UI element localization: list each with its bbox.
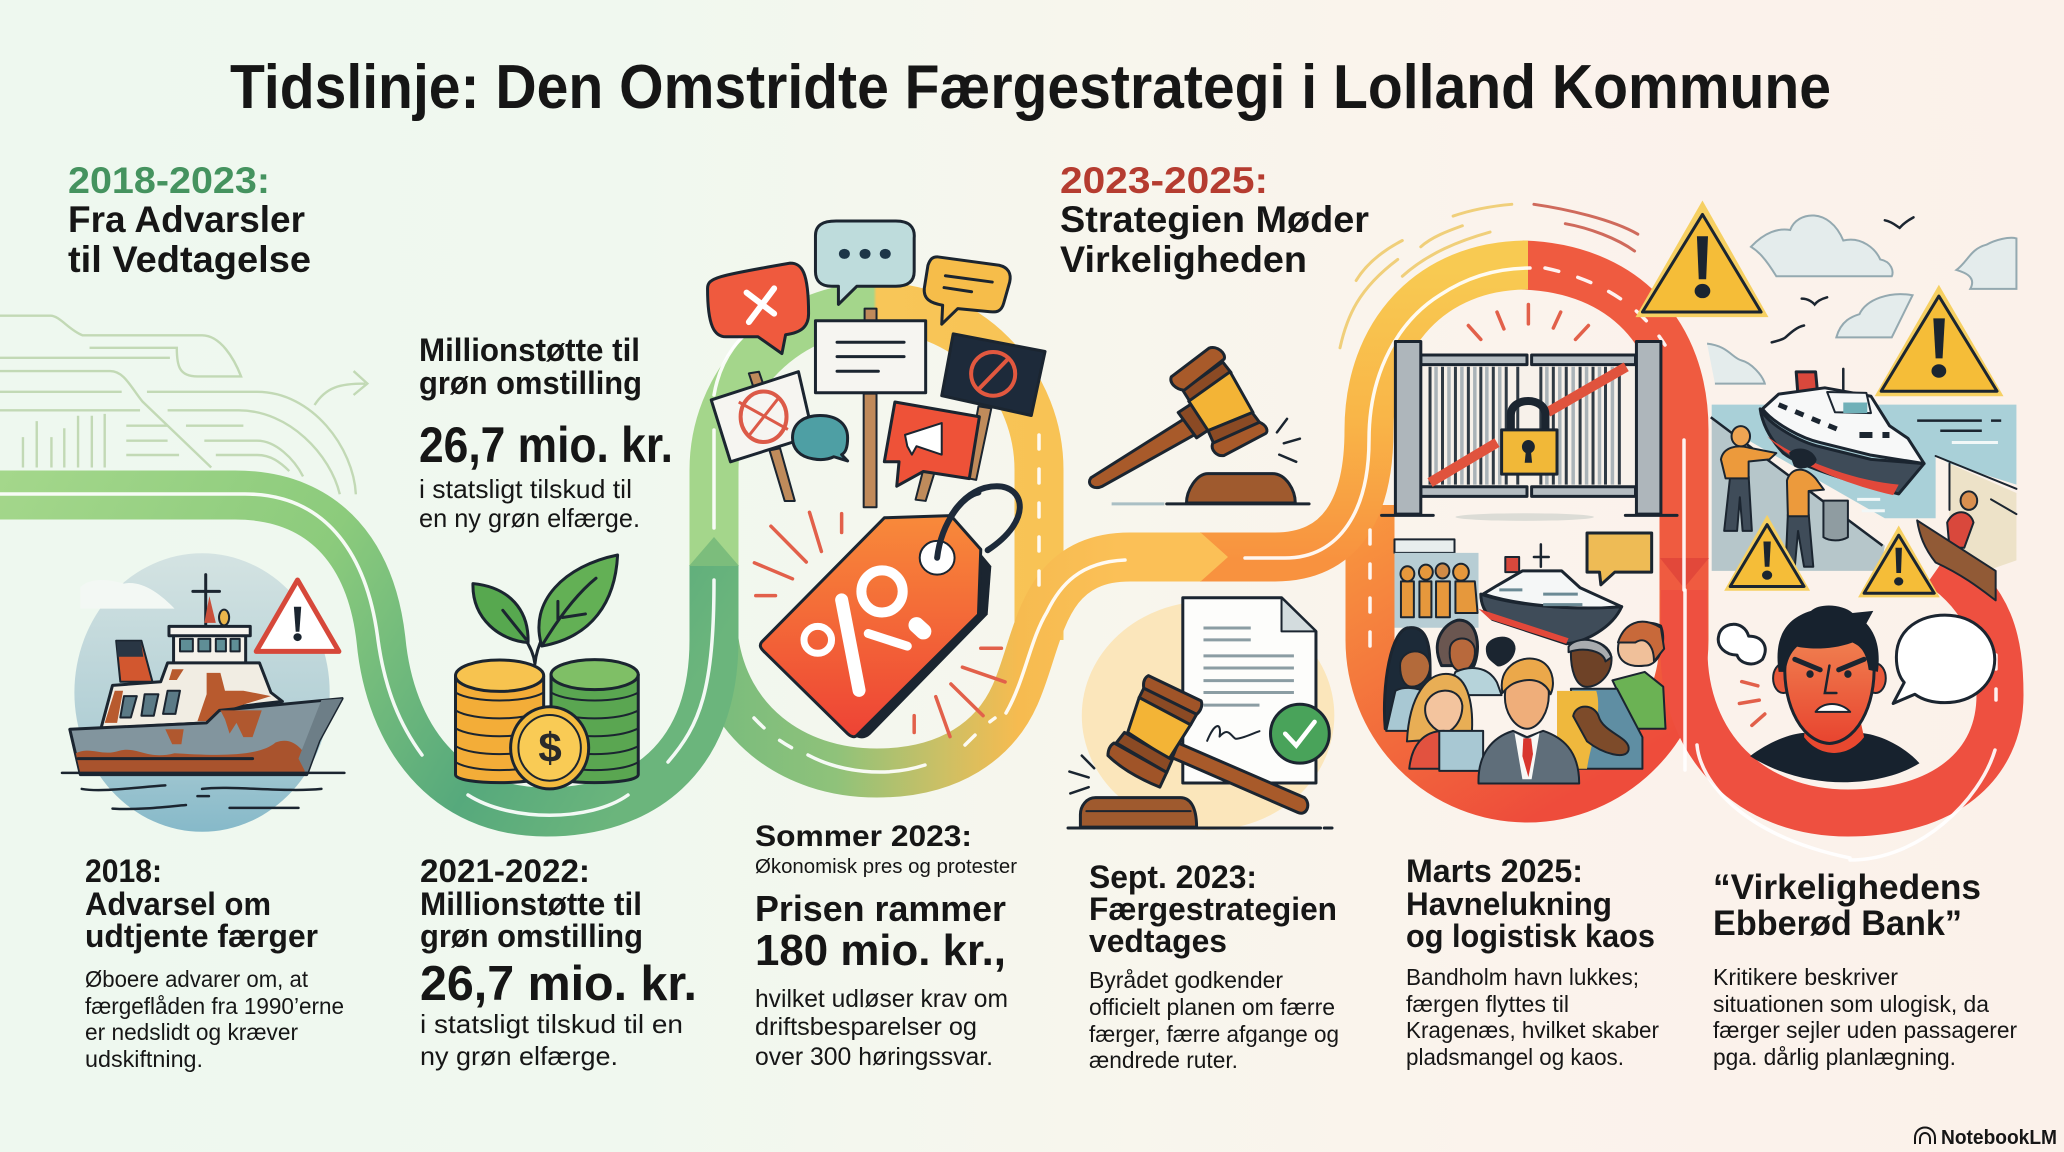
sparks [1468, 304, 1588, 339]
timeline text: quote: Kritikere beskriver [1713, 964, 1898, 990]
timeline text: Sept. 2023: Byrådet godkender [1089, 967, 1283, 993]
background decoration: faded ferry line art [0, 316, 367, 494]
back row people [1384, 628, 1430, 729]
callout: millionstøtte upper: grøn omstilling [419, 365, 642, 401]
ship backdrop circle [74, 553, 330, 832]
timeline text: 2018: udskiftning. [85, 1046, 203, 1072]
large coin [511, 707, 589, 789]
green check [1271, 704, 1329, 763]
timeline text: Sommer 2023: driftsbesparelser og [755, 1013, 977, 1041]
road centre lines [0, 268, 1850, 858]
timeline text: Marts 2025: færgen flyttes til [1406, 991, 1569, 1017]
callout: millionstøtte upper: en ny grøn elfærge. [419, 503, 640, 533]
yellow speech bubble [924, 257, 1010, 324]
sparks [1739, 682, 1765, 725]
chevron: green up [689, 537, 739, 566]
callout: millionstøtte upper: 26,7 mio. kr. [419, 417, 673, 473]
timeline text: Marts 2025: Bandholm havn lukkes; [1406, 964, 1639, 990]
mast [193, 575, 219, 625]
teal bubble [792, 416, 848, 461]
timeline text: 2021-2022: 26,7 mio. kr. [420, 957, 697, 1011]
brown boat [1917, 520, 1996, 600]
sprout leaves [501, 578, 597, 664]
icon: rusty ferry with warning [62, 553, 344, 832]
timeline road [0, 265, 2000, 860]
timeline text: 2018 [85, 853, 344, 1072]
timeline text: Marts 2025: og logistisk kaos [1406, 918, 1655, 954]
timeline text: Marts 2025: Kragenæs, hvilket skaber [1406, 1017, 1659, 1043]
icon: gavel upper [1090, 348, 1309, 504]
icon: document and gavel [1068, 598, 1334, 830]
timeline text: 2018: Øboere advarer om, at [85, 966, 309, 992]
timeline text: quote: Ebberød Bank” [1713, 904, 1962, 943]
red bar [1430, 367, 1626, 483]
ears [1773, 664, 1793, 693]
timeline text: Sommer 2023: Økonomisk pres og protester [755, 856, 1017, 878]
percent symbol [804, 570, 923, 690]
hair [1778, 606, 1879, 672]
head [1785, 638, 1874, 743]
ferry [1796, 372, 1818, 396]
speed lines above arch [1340, 204, 1512, 348]
blonde woman [1407, 674, 1472, 741]
terminal shelter [1394, 539, 1455, 553]
section heading: 2018-2023: til Vedtagelse [68, 239, 311, 280]
road: arch two red [1522, 265, 1684, 590]
shoulders [1750, 733, 1919, 782]
dark-skinned man [1571, 641, 1612, 687]
timeline text: Marts 2025: Havnelukning [1406, 886, 1612, 922]
timeline text: Sept. 2023: vedtages [1089, 923, 1227, 959]
timeline text: Marts 2025: Marts 2025: [1406, 853, 1583, 889]
birds [1772, 217, 1913, 342]
timeline text: Sommer 2023: over 300 høringssvar. [755, 1043, 993, 1071]
section heading: 2023-2025: 2023-2025: [1060, 160, 1268, 201]
gold stack [456, 676, 544, 783]
brows, eyes, mouth [1795, 659, 1864, 670]
gavel head [1183, 362, 1231, 401]
timeline text: Sommer 2023 [755, 820, 1017, 1071]
timeline text: quote: færger sejler uden passagerer [1713, 1017, 2017, 1043]
timeline text: Sept. 2023: Færgestrategien [1089, 891, 1337, 927]
clouds [1751, 215, 1893, 276]
gavel handle [1090, 419, 1197, 488]
chevron: red down [1660, 558, 1709, 588]
waiting passengers [1401, 581, 1478, 617]
timeline text: Sommer 2023: Prisen rammer [755, 888, 1006, 929]
section heading: 2023-2025: Virkeligheden [1060, 239, 1307, 280]
timeline text: 2018: udtjente færger [85, 918, 318, 954]
man in suit [1505, 678, 1549, 729]
watermark: NotebookLM: NotebookLM [1941, 1127, 2057, 1149]
road: arch two yellow-orange [1190, 265, 1528, 557]
icon: harbour scene [1636, 201, 2016, 600]
timeline text: 2018: 2018: [85, 853, 162, 889]
dollar sign: $ [538, 724, 562, 771]
timeline text: 2021-2022 [420, 853, 697, 1071]
speech bubble [1587, 533, 1652, 585]
timeline text: Sept. 2023: officielt planen om færre [1089, 994, 1335, 1020]
icon: protest signs and price tag [708, 221, 1045, 738]
timeline text: 2018: Advarsel om [85, 886, 271, 922]
small ferry [1481, 594, 1622, 644]
hull [70, 699, 342, 775]
sparks around tag [754, 512, 1005, 737]
title: Tidslinje: Den Omstridte Færgestrategi i Lolland Kommune [230, 53, 1831, 122]
sign: white centre [864, 309, 877, 507]
timeline text: Sommer 2023: Sommer 2023: [755, 820, 972, 853]
road dashed lines [754, 268, 1996, 752]
funnel [116, 641, 152, 682]
thought bubble [1718, 624, 1765, 664]
timeline text: 2021-2022: grøn omstilling [420, 918, 643, 954]
callout: millionstøtte upper: i statsligt tilskud til [419, 474, 632, 504]
section heading: 2018-2023: 2018-2023: [68, 160, 270, 201]
timeline text: Marts 2025: pladsmangel og kaos. [1406, 1044, 1624, 1070]
gate panel [1421, 365, 1636, 487]
padlock [1511, 401, 1545, 430]
section heading: 2023-2025 [1060, 160, 1369, 280]
timeline text: quote: “Virkelighedens [1713, 868, 1981, 907]
section heading: 2018-2023 [68, 160, 311, 280]
dock [1712, 417, 1885, 571]
timeline text: 2018: færgeflåden fra 1990’erne [85, 993, 344, 1019]
timeline text: Sept. 2023: ændrede ruter. [1089, 1047, 1238, 1073]
timeline text: Marts 2025 [1406, 853, 1659, 1070]
icon: coins and sprout [456, 555, 638, 789]
timeline text: Sept. 2023 [1089, 859, 1339, 1073]
warning signs [1636, 201, 2004, 597]
water lines [62, 773, 344, 809]
lower gavel [1172, 743, 1308, 813]
timeline text: 2018: er nedslidt og kræver [85, 1019, 298, 1045]
road: bottom loop green to yellow [714, 557, 1200, 773]
section heading: 2023-2025: Strategien Møder [1060, 199, 1369, 240]
gate posts [1395, 342, 1661, 514]
timeline text: quote [1713, 868, 2017, 1070]
road: arch one [714, 307, 1039, 640]
timeline text: 2021-2022: ny grøn elfærge. [420, 1041, 618, 1071]
chevron: yellow to orange right [1200, 532, 1228, 582]
price tag [850, 554, 991, 738]
road: third loop red [1684, 565, 2000, 813]
blue speech bubble [815, 221, 914, 304]
timeline text: Sommer 2023: 180 mio. kr., [755, 926, 1006, 975]
sea [1712, 405, 2016, 518]
person pointing [1724, 476, 1752, 531]
warning sign [256, 580, 339, 651]
person on dock [1786, 514, 1813, 567]
timeline text: 2021-2022: i statsligt tilskud til en [420, 1009, 683, 1039]
timeline text: 2021-2022: 2021-2022: [420, 853, 590, 889]
section heading: 2018-2023: Fra Advarsler [68, 199, 305, 240]
icon: closed harbour gate [1340, 204, 1677, 521]
green stack [551, 675, 638, 783]
timeline text: 2021-2022: Millionstøtte til [420, 886, 642, 922]
road: green entry and first valley [0, 495, 714, 812]
pier with person [1949, 464, 2016, 571]
sign: black no-symbol [966, 406, 991, 480]
document [1183, 598, 1316, 783]
price tag tie loop [937, 486, 1020, 558]
timeline text: quote: pga. dårlig planlægning. [1713, 1044, 1956, 1070]
red speech bubble [708, 263, 809, 354]
timeline text: Sept. 2023: Sept. 2023: [1089, 859, 1257, 895]
callout: millionstøtte upper [419, 332, 673, 533]
sign: left crossed [749, 372, 795, 501]
bridge [174, 632, 246, 664]
timeline text: quote: situationen som ulogisk, da [1713, 991, 1989, 1017]
speech bubble [1893, 615, 1995, 703]
neck [1804, 716, 1864, 753]
superstructure [101, 663, 282, 728]
bollard [1823, 501, 1848, 540]
timeline text: Sommer 2023: hvilket udløser krav om [755, 985, 1008, 1013]
road: pill lower orange-red section [1370, 505, 1684, 798]
icon: crowd at ferry [1384, 533, 1666, 783]
callout: millionstøtte upper: Millionstøtte til [419, 332, 640, 368]
sign: red megaphone [916, 469, 935, 501]
icon: angry citizen [1718, 606, 1995, 782]
timeline text: Sept. 2023: færger, færre afgange og [1089, 1021, 1339, 1047]
